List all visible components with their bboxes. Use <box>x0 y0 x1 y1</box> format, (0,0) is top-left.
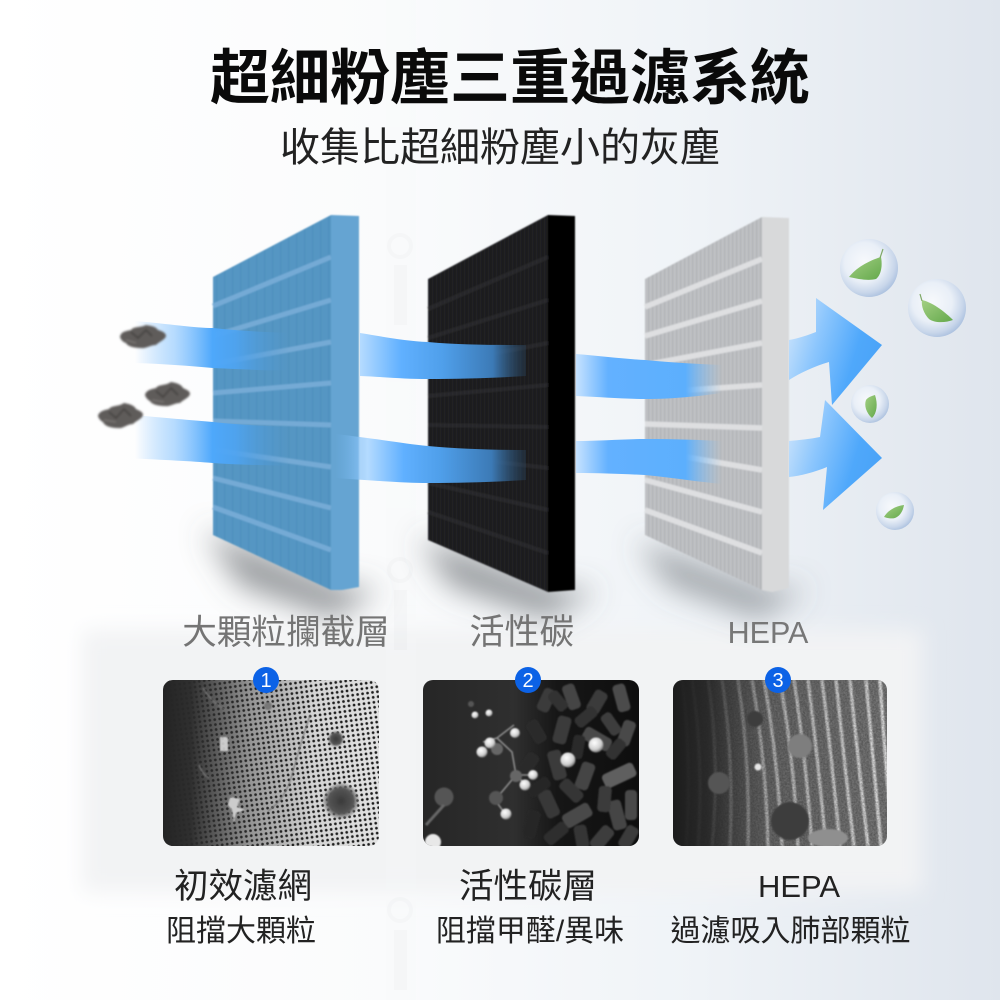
carbon pellets <box>533 683 639 846</box>
filter shadows <box>205 530 808 618</box>
blue filter side <box>331 215 359 590</box>
badge 1: 1 <box>260 670 272 692</box>
faint vertical watermark band <box>386 0 416 1000</box>
black filter panel <box>428 215 575 592</box>
icon: leaf bubble 1 <box>840 239 898 297</box>
title: 超細粉塵三重過濾系統 <box>210 45 810 112</box>
caption 2 text: 阻擋甲醛/異味 <box>436 915 624 948</box>
badge 2 <box>515 667 541 693</box>
icon: arrow out upper <box>789 298 882 405</box>
icon: leaf bubble 2 <box>908 279 966 337</box>
black filter side <box>548 215 575 592</box>
molecule <box>425 701 604 850</box>
caption 1 heading: 初效濾網 <box>174 868 312 906</box>
filter label: coarse: 大顆粒攔截層 <box>182 614 390 652</box>
caption 3 heading: HEPA <box>758 869 840 904</box>
airflow streams <box>125 321 722 484</box>
stream: lower intake <box>125 414 290 466</box>
lower panel background <box>82 630 922 892</box>
filter label: HEPA: HEPA <box>728 616 809 650</box>
black filter slats <box>428 257 548 553</box>
stream: lower through blue <box>335 434 526 483</box>
icon: leaf bubble 4 <box>876 492 914 530</box>
stream: upper intake <box>135 321 290 370</box>
subtitle: 收集比超細粉塵小的灰塵 <box>280 126 720 170</box>
grey filter slats <box>645 259 762 553</box>
badge 3 <box>765 667 791 693</box>
stream: lower through black <box>576 439 722 484</box>
badge 2: 2 <box>522 670 534 692</box>
blue filter slats <box>213 257 331 550</box>
stream: upper through black <box>576 354 722 399</box>
photo 2: activated carbon with molecule <box>423 680 640 852</box>
black filter face <box>428 215 548 592</box>
filter label: carbon: 活性碳 <box>469 613 575 652</box>
caption 3 text: 過濾吸入肺部顆粒 <box>670 915 910 948</box>
icon: dust clumps <box>98 325 190 428</box>
icon: arrow out lower <box>789 400 882 510</box>
caption 2 heading: 活性碳層 <box>459 868 597 906</box>
badge 1 <box>253 667 279 693</box>
grey filter face <box>645 217 762 590</box>
icon: leaf bubble 3 <box>851 385 889 423</box>
caption 1 text: 阻擋大顆粒 <box>166 915 316 948</box>
photo 1: mesh with particles <box>163 680 379 846</box>
grey HEPA filter panel <box>645 217 789 592</box>
blue filter face <box>213 215 331 590</box>
grey filter side <box>762 217 789 592</box>
blue filter panel <box>213 215 359 590</box>
stream: upper through blue <box>360 333 526 379</box>
badge 3: 3 <box>772 670 784 692</box>
photo 3: HEPA fibres <box>673 680 893 847</box>
